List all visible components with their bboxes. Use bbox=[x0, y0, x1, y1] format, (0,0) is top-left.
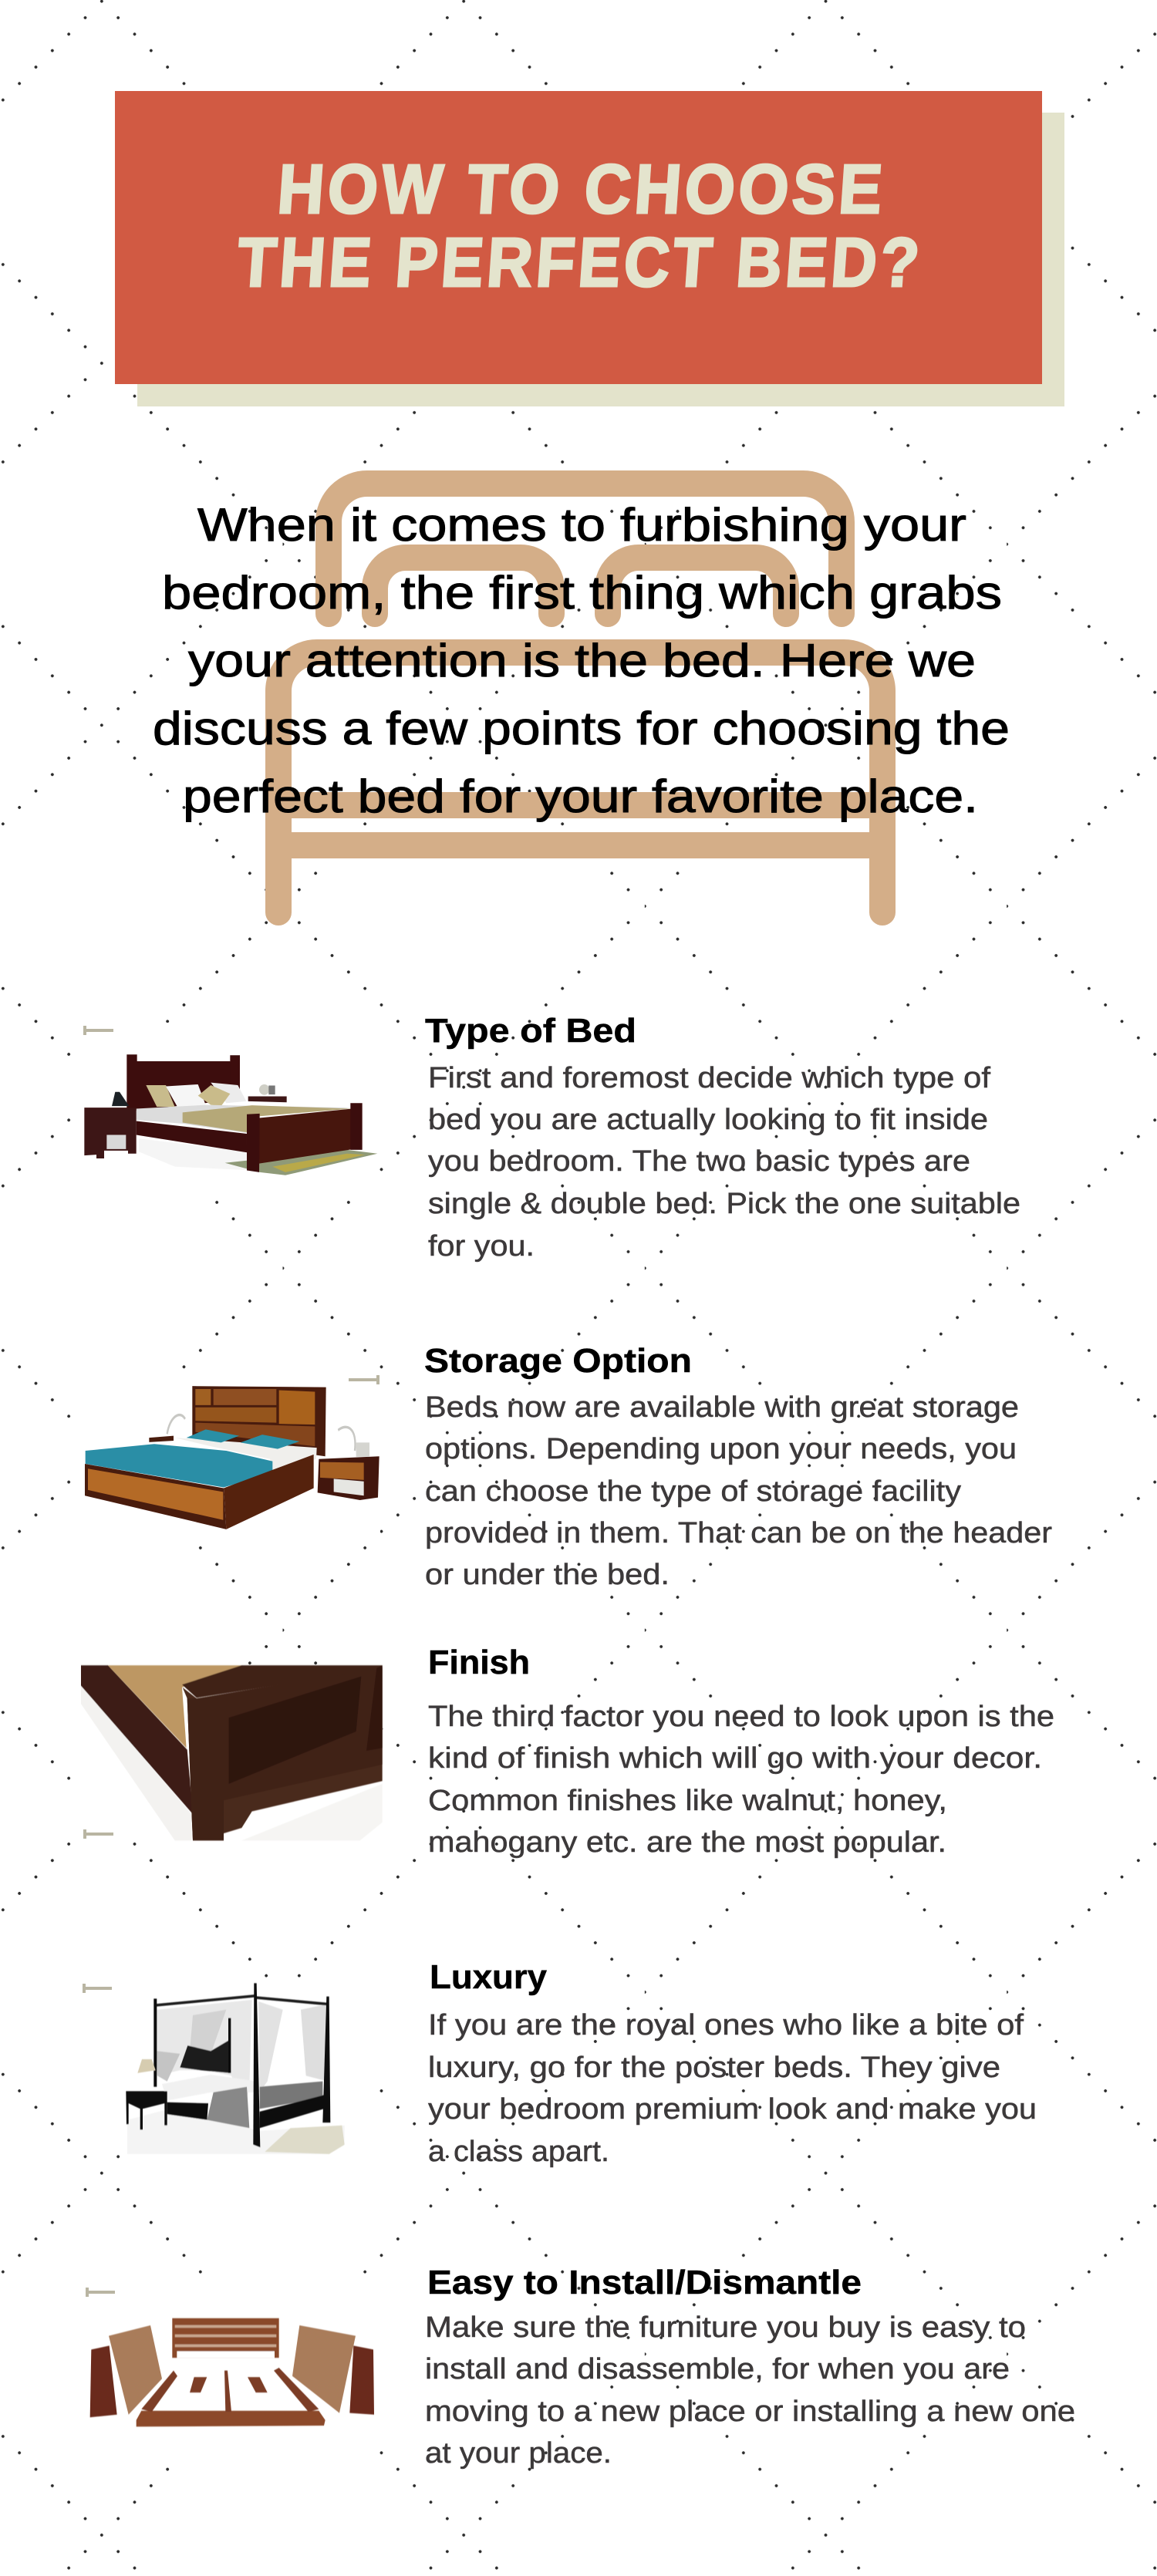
text: Type of Bed: single & double bed. Pick the one suitable bbox=[428, 1188, 1020, 1220]
nail bbox=[84, 1829, 113, 1839]
photo: wooden bed with nightstand bbox=[81, 1023, 378, 1194]
title line 1: HOW TO CHOOSE bbox=[275, 150, 889, 228]
banner panel bbox=[115, 91, 1042, 384]
text: Finish bbox=[428, 1701, 1054, 1859]
text: Finish: The third factor you need to look upon is the bbox=[428, 1701, 1054, 1733]
text: Easy to Install/Dismantle: Make sure the furniture you buy is easy to bbox=[425, 2311, 1026, 2344]
nail bbox=[86, 2288, 115, 2297]
text: Storage Option: Beds now are available with great storage bbox=[425, 1391, 1019, 1424]
text: Easy to Install/Dismantle: install and disassemble, for when you are bbox=[425, 2353, 1010, 2385]
icon: bed outline bbox=[278, 484, 882, 912]
banner shadow bbox=[137, 113, 1064, 406]
text: Type of Bed: for you. bbox=[428, 1230, 535, 1263]
text: Storage Option: can choose the type of storage facility bbox=[425, 1475, 961, 1508]
heading: Luxury: Luxury bbox=[430, 1958, 548, 1996]
text: Type of Bed bbox=[428, 1062, 1020, 1263]
text: Storage Option: options. Depending upon your needs, you bbox=[425, 1433, 1017, 1465]
text: Type of Bed: you bedroom. The two basic types are bbox=[428, 1145, 970, 1178]
photo: bed corner finish close-up bbox=[81, 1665, 383, 1840]
text: Luxury bbox=[428, 2009, 1037, 2168]
text: Luxury: a class apart. bbox=[428, 2136, 609, 2168]
text: Finish: kind of finish which will go with your decor. bbox=[428, 1742, 1042, 1775]
text: Luxury: your bedroom premium look and make you bbox=[428, 2093, 1037, 2126]
text: Finish: Common finishes like walnut, honey, bbox=[428, 1785, 947, 1817]
photo: dismantled bed parts bbox=[83, 2282, 378, 2461]
intro text: discuss a few points for choosing the bbox=[153, 703, 1010, 754]
text: Luxury: luxury, go for the poster beds. They give bbox=[428, 2052, 1000, 2084]
photo: storage bed with teal mattress bbox=[81, 1374, 380, 1543]
text: Easy to Install/Dismantle bbox=[425, 2311, 1075, 2470]
intro text: When it comes to furbishing your bbox=[197, 499, 966, 551]
heading: Type of Bed: Type of Bed bbox=[425, 1012, 636, 1050]
text: Storage Option bbox=[425, 1391, 1052, 1591]
heading: Finish: Finish bbox=[428, 1644, 530, 1681]
text: Easy to Install/Dismantle: at your place. bbox=[425, 2437, 612, 2470]
nail bbox=[84, 1026, 113, 1035]
text: Type of Bed: First and foremost decide which type of bbox=[428, 1062, 990, 1094]
title banner bbox=[115, 91, 1064, 406]
text: Luxury: If you are the royal ones who like a bite of bbox=[428, 2009, 1024, 2042]
text: Easy to Install/Dismantle: moving to a new place or installing a new one bbox=[425, 2396, 1075, 2428]
text: Storage Option: provided in them. That can be on the header bbox=[425, 1517, 1052, 1549]
intro text: your attention is the bed. Here we bbox=[188, 635, 976, 686]
title line 2: THE PERFECT BED? bbox=[235, 224, 926, 302]
nail bbox=[349, 1375, 378, 1384]
intro text bbox=[153, 499, 1010, 822]
text: Type of Bed: bed you are actually looking to fit inside bbox=[428, 1104, 988, 1136]
text: Finish: mahogany etc. are the most popular. bbox=[428, 1826, 946, 1859]
intro text: perfect bed for your favorite place. bbox=[183, 770, 978, 822]
photo: black four-poster bed bbox=[83, 1978, 378, 2156]
nail bbox=[83, 1984, 112, 1993]
intro text: bedroom, the first thing which grabs bbox=[162, 567, 1002, 619]
heading: Easy to Install/Dismantle: Easy to Install/Dismantle bbox=[427, 2264, 862, 2301]
text: Storage Option: or under the bed. bbox=[425, 1559, 670, 1591]
heading: Storage Option: Storage Option bbox=[424, 1342, 692, 1380]
